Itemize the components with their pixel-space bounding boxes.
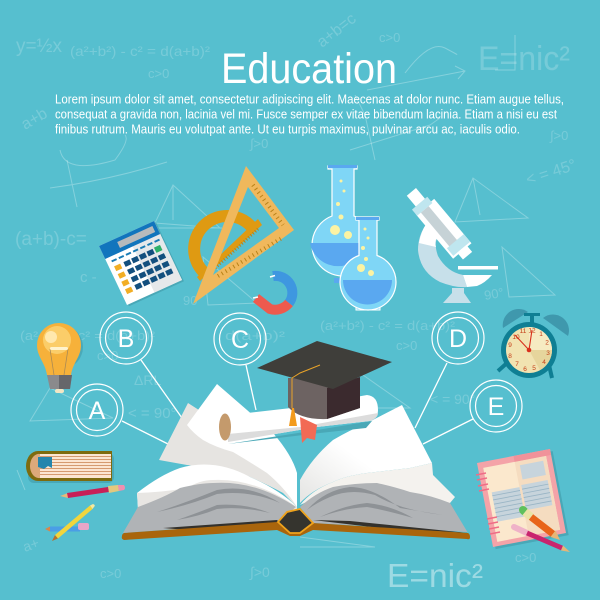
intro text block: Lorem ipsum dolor sit amet, consectetur adipiscing elit. Maecenas at dolor nunc. Etiam augue tellus, [55,92,564,106]
icon: alarm clock: 7 [515,361,519,368]
page stack right [300,463,455,505]
label circle A: A [89,397,106,425]
open book [122,384,470,540]
icon: alarm clock: 6 [523,366,527,373]
label circle D [432,312,484,364]
background: chalk formulas and geometry: a+ [21,534,41,555]
dark inner pages [163,520,468,533]
icon: alarm clock: 9 [508,342,512,349]
icon: alarm clock: 12 [528,328,536,334]
icon: orange pencil [523,510,560,540]
connector lines [122,360,473,444]
icon: set square ruler [193,166,294,304]
spine [278,509,313,533]
icon: microscope [403,184,498,303]
background: chalk formulas and geometry: c>0 [148,66,169,81]
icon: alarm clock: 2 [545,340,549,346]
background: chalk formulas and geometry: y=½x [16,36,62,57]
icon: large flask [310,165,374,283]
right lifted page [300,405,432,503]
graduation cap [257,341,392,426]
page wave lines [157,487,443,520]
intro text block [55,92,564,136]
label circle E: E [488,393,504,421]
background: chalk formulas and geometry: (a²+b²) - c² = d(a+b)² [70,43,210,59]
background: chalk formulas and geometry: (a²+b²) - c² = d(a+b)² [20,328,156,343]
background: chalk formulas and geometry: c>0 [396,338,417,353]
background: chalk formulas and geometry: a+b=c [314,10,360,51]
background: chalk formulas and geometry: a+b [19,105,51,133]
background: chalk formulas and geometry: 90 [183,293,197,308]
background: chalk formulas and geometry: 90° [483,285,505,303]
title: Education [221,45,397,93]
background: chalk formulas and geometry: c>0 [515,550,536,565]
label circle B: B [118,325,134,353]
icon: yellow pencil [52,504,95,541]
background: chalk formulas and geometry: d(a+b)² [225,328,286,343]
background: chalk formulas and geometry: ∫>0 [249,564,270,580]
page stack left [137,465,297,510]
icon: alarm clock: 4 [542,359,546,366]
icon: alarm clock: 11 [520,328,527,335]
icon: horseshoe magnet [253,276,292,310]
icon: alarm clock [498,309,569,378]
icon: magenta pencil [514,527,570,552]
background: chalk formulas and geometry: (a+b)-c= [15,229,87,250]
background: chalk formulas and geometry: < = 90° [128,405,177,422]
brown cover [122,522,470,540]
left lifted pages [159,403,297,507]
background: chalk formulas and geometry: ∫>0 [249,136,268,151]
background: chalk formulas and geometry: c>0 [379,30,400,45]
background: chalk formulas and geometry: ΔRL [134,372,161,388]
background: chalk formulas and geometry: (a²+b²) - c² = d(a+b)² [320,318,456,333]
label circle E [470,380,522,432]
icon: closed book [26,451,114,483]
ribbon [300,417,317,443]
icon: blue pencil [45,523,89,532]
background: chalk formulas and geometry: < = 45° [524,157,578,189]
label circle C [214,313,266,365]
icon: alarm clock: 10 [512,334,520,341]
label circle C: C [231,326,249,354]
icon: alarm clock: 3 [546,350,550,357]
icon: red pencil [60,485,125,498]
background: chalk formulas and geometry: c>0 [97,348,118,363]
background: chalk formulas and geometry: c - [80,269,97,286]
icon: alarm clock: 8 [508,353,512,360]
icon: light bulb [37,323,83,393]
icon: protractor [194,216,262,281]
background: chalk formulas and geometry: c>0 [100,566,121,581]
background: chalk formulas and geometry: E=nic² [387,557,483,594]
intro text block: finibus rutrum. Mauris eu volutpat ante. Ut eu turpis maximus, pulvinar arcu ac, iaculis odio. [55,122,520,136]
background: chalk formulas and geometry: < = 90° [430,391,475,407]
icon: alarm clock: 5 [532,365,536,372]
label circle B [100,312,152,364]
icon: calculator [99,220,184,307]
label circle A [71,384,123,436]
icon: notebook [476,449,569,550]
icon: small flask [340,217,396,310]
label circle D: D [449,325,467,353]
background: chalk formulas and geometry: E=nic² [478,40,570,78]
background: chalk formulas and geometry: ∫>0 [549,128,568,143]
icon: alarm clock: 1 [539,331,543,338]
diploma scroll [219,395,378,444]
intro text block: consequat a gravida non, lacinia vel mi. Fusce semper ex vitae bibendum lacinia. Etiam a nisi eu est [55,108,557,122]
